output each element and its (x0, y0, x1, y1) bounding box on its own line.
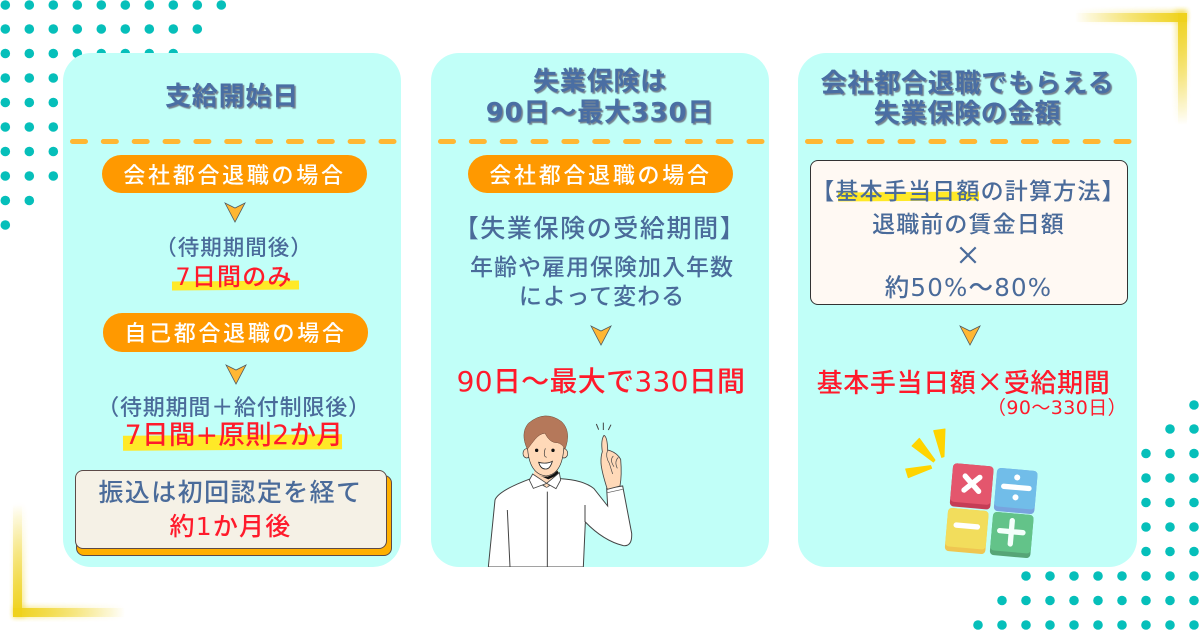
heading: 会社都合退職でもらえる失業保険の金額: 会社都合退職でもらえる (820, 69, 1115, 99)
background: dots top left (0, 0, 226, 230)
callout: 振込 (75, 470, 392, 556)
text: 基本手当日額×受給期間: 基本手当日額×受給期間 (817, 361, 1110, 400)
hair (524, 416, 568, 449)
text: 基本手当日額の計算方法: 【基本手当日額の計算方法】 (811, 179, 1126, 205)
box: 基本手当日額の計算方法 (810, 160, 1128, 305)
text: 退職前の賃金日額 × 約50%～80%: 約50%～80% (885, 273, 1052, 302)
heading: 支給開始日: 支給開始日 (165, 82, 299, 112)
neck (533, 468, 559, 487)
heading: 失業保険は90日～最大330日: 90日～最大330日 (486, 98, 714, 128)
divider (805, 139, 1132, 144)
callout box (74, 470, 386, 549)
text: 7日間のみ: 7日間のみ (175, 263, 293, 291)
shirt (488, 479, 632, 567)
highlight: yellow marker (172, 281, 299, 290)
icon: arrow down (959, 325, 981, 346)
decoration: yellow corner bottom left (9, 506, 122, 622)
text: 約1か月後: 約1か月後 (170, 512, 291, 541)
spark lines (596, 423, 611, 430)
text: 90～330日: （90～330日） (987, 397, 1127, 419)
text: 7日間+原則2か月: 7日間+原則2か月 (125, 420, 343, 451)
panel: 失業保険は90日～最大330日 (431, 53, 769, 567)
key: plus (990, 512, 1034, 558)
pill: 自己都合退職の場合: 自己都合退職の場合 (124, 316, 347, 348)
pill: 会社都合退職の場合: 会社都合退職の場合 (123, 158, 346, 190)
divider (70, 139, 396, 144)
icon: arrow down (590, 325, 612, 346)
text: 失業保険の受給期間: 【失業保険の受給期間】 (454, 214, 746, 243)
highlight: yellow marker (123, 434, 342, 451)
text: 待期期間後: （待期期間後） (155, 236, 313, 261)
text: 退職前の賃金日額 × 約50%～80% (872, 212, 1065, 302)
highlight: yellow marker (838, 192, 979, 201)
face (523, 428, 568, 476)
sparks (906, 429, 945, 478)
icon: arrow down (225, 364, 247, 385)
panel: 会社都合退職でもらえる失業保険の金額 (798, 53, 1137, 567)
key: divide (994, 468, 1038, 514)
icon: arrow down (224, 202, 246, 223)
key: multiply (950, 463, 994, 510)
divider (438, 139, 764, 144)
callout shadow (76, 475, 392, 556)
collar (529, 473, 561, 489)
text: 年齢や雇用保険加入年数 (470, 255, 734, 310)
text: 待期期間＋給付制限後: （待期期間＋給付制限後） (97, 396, 371, 421)
text: 退職前の賃金日額 × 約50%～80%: 退職前の賃金日額 (872, 212, 1065, 238)
pill: 会社都合退職の場合: 会社都合退職の場合 (489, 158, 712, 190)
heading: 失業保険は90日～最大330日: 失業保険は (533, 67, 667, 97)
illustration: man pointing up (488, 416, 632, 567)
text: 90日～最大で330日間: 90日～最大で330日間 (457, 365, 745, 398)
text: 振込は初回認定を経て: 振込は初回認定を経て (98, 478, 362, 507)
pill: 自己都合退職の場合 (103, 313, 368, 352)
text: 退職前の賃金日額 × 約50%～80%: × (955, 236, 982, 273)
key: minus (945, 508, 989, 554)
text: 年齢や雇用保険加入年数: 年齢や雇用保険加入年数 (470, 255, 734, 281)
heading: 会社都合退職でもらえる失業保険の金額: 失業保険の金額 (874, 99, 1061, 129)
hand (601, 435, 621, 489)
decoration: yellow corner top right (1078, 6, 1191, 122)
background: dots bottom right (973, 400, 1199, 630)
hand detail (607, 450, 618, 474)
heading: 失業保険は90日～最大330日 (486, 67, 714, 128)
text: 年齢や雇用保険加入年数: によって変わる (519, 284, 685, 310)
panel: 支給開始日 (63, 53, 401, 567)
icon: calculator symbols (905, 428, 1038, 558)
heading: 会社都合退職でもらえる失業保険の金額 (820, 69, 1115, 129)
